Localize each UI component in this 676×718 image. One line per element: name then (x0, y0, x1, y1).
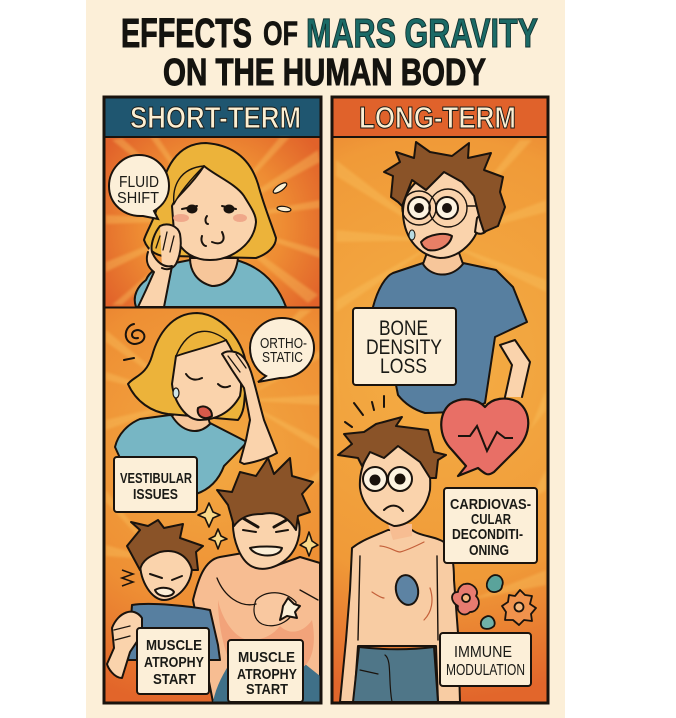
character: girl with puffy face (135, 143, 286, 307)
label: muscle atrophy start 1: MUSCLE (146, 637, 202, 654)
panel: fluid shift (104, 137, 321, 307)
character: shirtless boy (338, 417, 460, 702)
panel: orthostatic, vestibular, muscle (104, 308, 321, 703)
icon: alarm ticks (345, 396, 384, 427)
label: cardiovascular deconditioning: CARDIOVAS- (450, 496, 531, 513)
label: vestibular issues: ISSUES (133, 486, 178, 503)
label: vestibular issues: VESTIBULAR (120, 470, 192, 487)
panel: long-term (331, 96, 549, 703)
title: OF (263, 15, 298, 53)
callout: orthostatic: STATIC (262, 349, 303, 366)
icon: sparkles (198, 503, 318, 556)
label: bone density loss: BONE (379, 317, 428, 340)
label: cardiovascular deconditioning: CULAR (471, 511, 511, 528)
character: boy with glasses (372, 142, 530, 413)
label: cardiovascular deconditioning: DECONDITI- (452, 526, 523, 543)
title: EFFECTS (121, 10, 252, 56)
label: bone density loss: LOSS (380, 355, 427, 378)
label: muscle atrophy start 2: ATROPHY (237, 666, 297, 683)
callout: orthostatic: ORTHO- (260, 335, 307, 352)
character: dizzy girl (115, 313, 277, 494)
callout: fluid shift: FLUID (119, 174, 159, 191)
title: ON THE HUMAN BODY (163, 52, 486, 94)
title (121, 10, 538, 94)
label: bone density loss (353, 308, 456, 385)
label: cardiovascular deconditioning (444, 488, 537, 563)
character: small boy (107, 520, 220, 678)
icon: dizzy spiral (124, 324, 144, 360)
icon: germs (452, 575, 536, 629)
header: long-term: LONG-TERM (359, 100, 516, 135)
character: strong man (193, 458, 320, 702)
callout: fluid shift (109, 155, 169, 219)
label: muscle atrophy start 2 (228, 640, 303, 702)
label: vestibular issues (114, 457, 197, 512)
page background (86, 0, 565, 718)
panel: short-term (103, 96, 322, 703)
callout: fluid shift: SHIFT (117, 190, 159, 207)
icon: sweat drop (409, 230, 415, 240)
label: muscle atrophy start 2: START (246, 681, 288, 698)
header: short-term: SHORT-TERM (130, 100, 301, 135)
label: muscle atrophy start 1: START (153, 671, 196, 688)
label: immune modulation (440, 633, 531, 686)
icon: sweat drops (272, 181, 291, 213)
label: muscle atrophy start 1 (137, 628, 209, 694)
label: muscle atrophy start 1: ATROPHY (144, 654, 204, 671)
label: bone density loss: DENSITY (366, 336, 442, 359)
label: immune modulation: MODULATION (446, 662, 525, 679)
icon: heart with pulse (441, 399, 528, 476)
label: muscle atrophy start 2: MUSCLE (238, 649, 295, 666)
label: immune modulation: IMMUNE (454, 644, 512, 661)
label: cardiovascular deconditioning: ONING (469, 542, 509, 559)
title: MARS GRAVITY (306, 10, 538, 56)
panel: body of long-term (332, 137, 548, 703)
icon: shiver lines (122, 570, 133, 586)
callout: orthostatic (250, 318, 314, 382)
